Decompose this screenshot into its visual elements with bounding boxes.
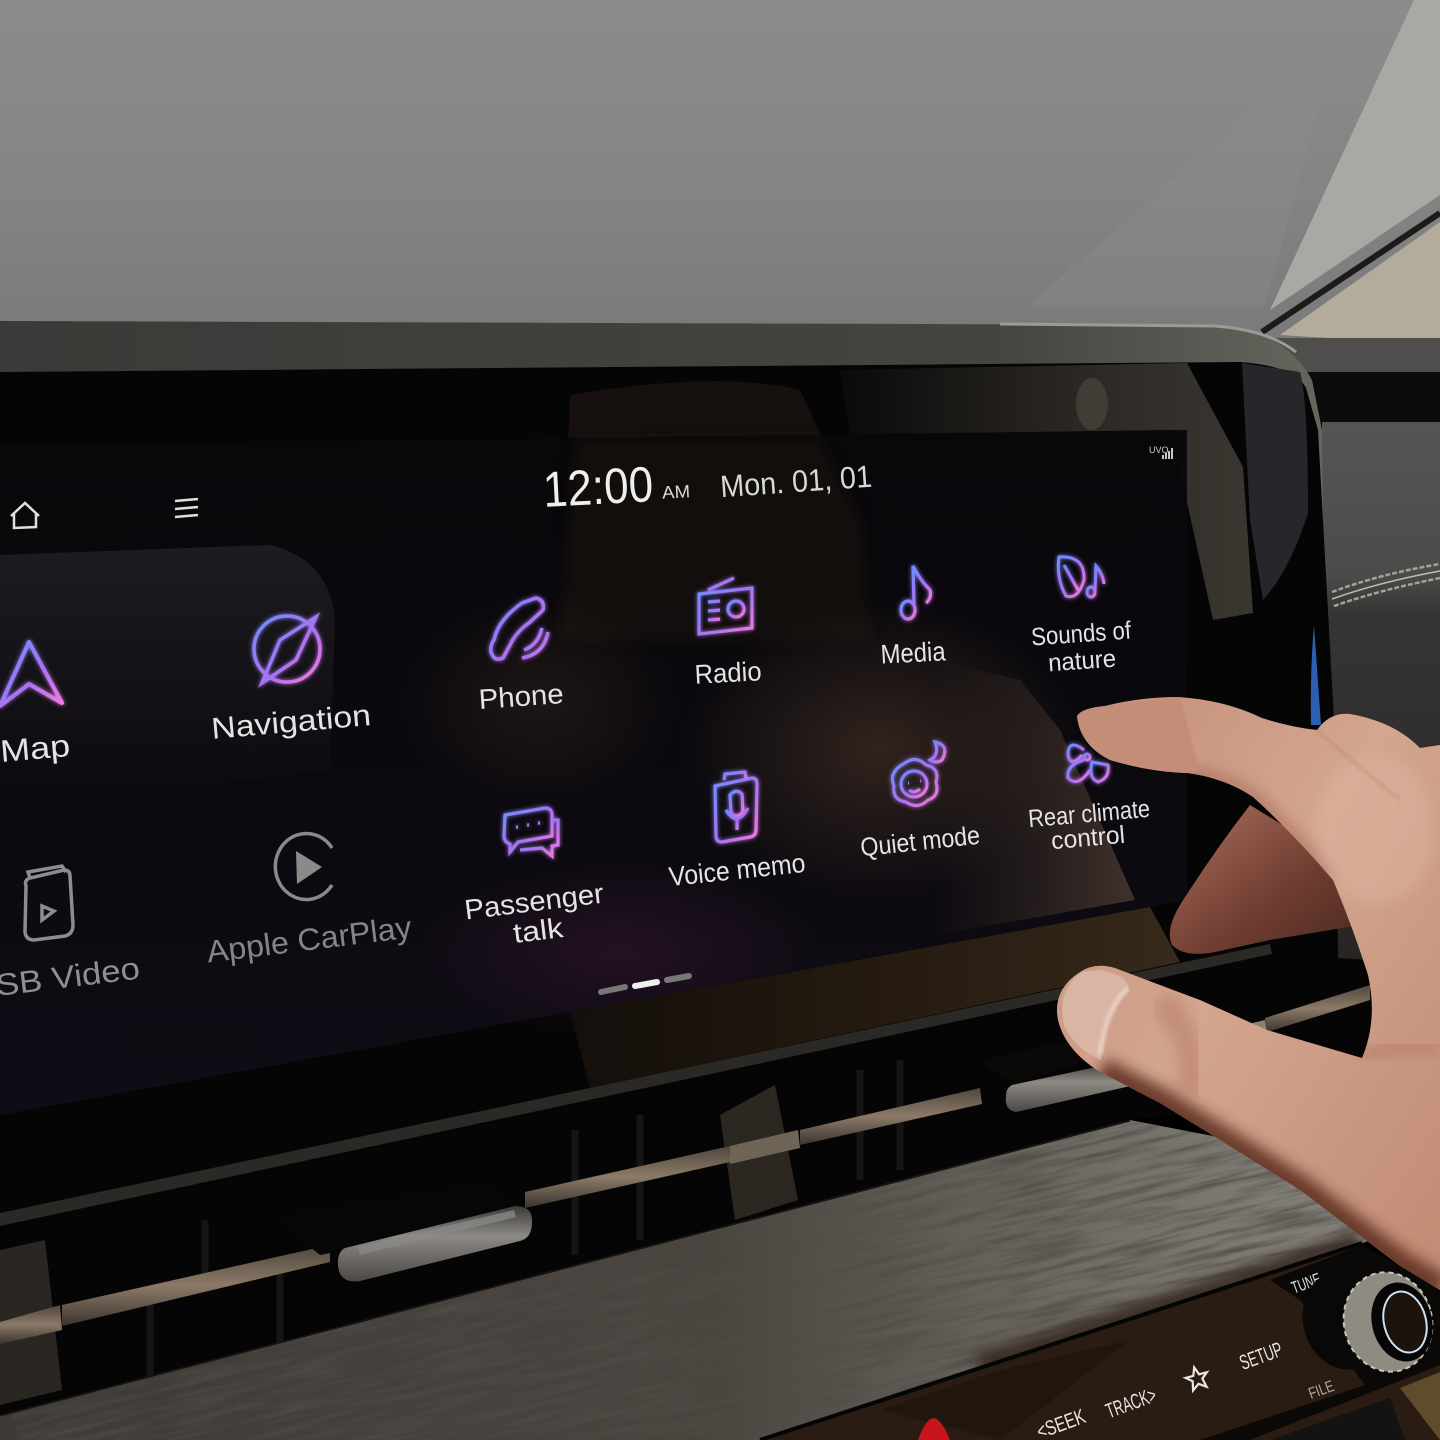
icon: menu	[175, 499, 198, 517]
vent divider left	[0, 1240, 62, 1405]
label: rear climate control	[1027, 795, 1151, 855]
icon: compass	[254, 616, 320, 683]
label: voice memo: Voice memo	[667, 848, 807, 892]
icon: play circle	[275, 834, 332, 900]
app: passenger talk	[463, 808, 605, 949]
lower bar	[0, 985, 1370, 1344]
red hazard button	[918, 1418, 950, 1440]
faint reflection on windshield	[1030, 105, 1320, 305]
page indicator dots	[601, 976, 689, 992]
panel label: track: TRACK>	[1103, 1384, 1160, 1423]
icon: chat bubbles	[504, 808, 558, 856]
icon: flower and moon	[892, 742, 945, 806]
door leather panel	[1270, 338, 1440, 1062]
label: passenger talk: Passenger	[463, 878, 605, 925]
label: rear climate control: control	[1050, 821, 1126, 855]
panel label: tune: TUNE	[1289, 1269, 1324, 1298]
index fingertip over icon	[1077, 697, 1200, 773]
panel label: setup: SETUP	[1237, 1338, 1286, 1375]
icon: memo microphone	[715, 772, 757, 842]
label: rear climate control: Rear climate	[1027, 795, 1151, 833]
control panel	[760, 1243, 1440, 1440]
app: quiet mode	[859, 742, 981, 862]
air vent recess	[0, 954, 1440, 1415]
screen lower lip	[0, 944, 1272, 1226]
status icon: uvo signal	[1149, 445, 1172, 459]
app: voice memo	[667, 772, 807, 892]
panel label: file: FILE	[1306, 1378, 1337, 1403]
vent divider center	[720, 1085, 798, 1220]
icon: usb drive	[25, 866, 73, 940]
icon: home	[11, 503, 39, 528]
label: navigation: Navigation	[210, 699, 372, 746]
label: phone: Phone	[478, 678, 565, 715]
icon: phone handset	[491, 598, 548, 659]
label: passenger talk: talk	[511, 912, 566, 949]
vent handle left	[270, 1180, 532, 1281]
app: map	[0, 642, 71, 769]
app: apple carplay	[205, 834, 414, 969]
label: map: Map	[0, 728, 71, 769]
label: media: Media	[880, 636, 947, 670]
lower glass warm reflection	[570, 907, 1180, 1088]
windshield background	[0, 0, 1440, 340]
app: navigation	[210, 616, 372, 746]
glare panel on windshield	[1270, 0, 1440, 310]
glass reflections	[560, 363, 1308, 640]
label: quiet mode: Quiet mode	[859, 820, 981, 862]
app: radio	[694, 578, 762, 690]
app: media	[880, 566, 947, 670]
icon: star button	[1184, 1365, 1210, 1391]
tune knob	[1292, 1261, 1440, 1381]
icon: radio	[699, 578, 752, 634]
label: sounds of nature: Sounds of	[1030, 617, 1132, 651]
label: sounds of nature: nature	[1047, 645, 1117, 677]
status icon: uvo signal: UVO	[1149, 445, 1169, 455]
hand with index finger and thumb	[1057, 697, 1440, 1290]
icon: fan	[1068, 745, 1108, 782]
icon: leaf and note	[1058, 557, 1104, 597]
wood trim	[0, 1120, 1368, 1440]
app: phone	[478, 598, 565, 715]
screen bezel	[0, 321, 1325, 700]
vent slats	[150, 1060, 900, 1380]
blue accent	[1311, 625, 1321, 725]
middle finger	[1170, 805, 1360, 954]
icon: music note	[901, 566, 930, 619]
beige dash top	[1280, 222, 1440, 345]
icon: map arrow	[0, 642, 62, 706]
clock am label: AM	[662, 481, 691, 503]
clock: 12:00	[542, 456, 654, 518]
windshield edge line	[1262, 213, 1440, 332]
app: sounds of nature	[1030, 557, 1132, 677]
screen glass	[0, 362, 1340, 1340]
label: passenger talk	[463, 878, 605, 949]
label: sounds of nature	[1030, 617, 1132, 677]
label: radio: Radio	[694, 656, 762, 690]
app: rear climate control	[1027, 745, 1151, 855]
app: usb video	[0, 866, 142, 1006]
label: apple carplay: Apple CarPlay	[205, 910, 414, 969]
bezel top highlight	[1000, 324, 1296, 352]
vent handle right	[980, 1040, 1135, 1112]
date: Mon. 01, 01	[719, 459, 873, 504]
display panel	[0, 430, 1187, 1115]
